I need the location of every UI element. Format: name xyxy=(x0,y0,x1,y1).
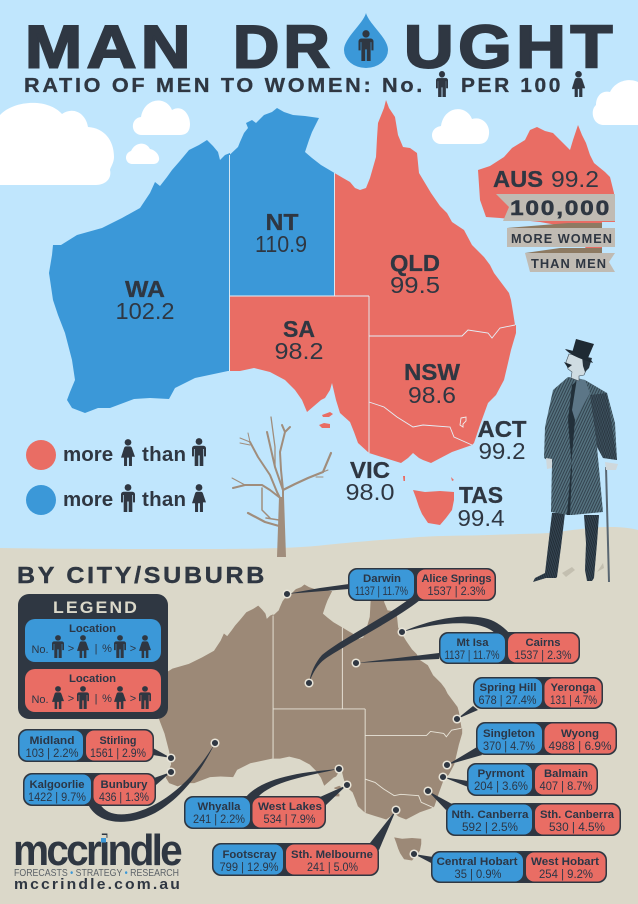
label: NSW: NSW xyxy=(404,359,460,385)
callout: Nth. Canberra / Sth. Canberra: Sth. Canberra xyxy=(540,809,615,821)
label: TAS: 99.4 xyxy=(458,505,505,531)
callout: Singleton / Wyong xyxy=(476,722,617,755)
label: VIC: 98.0 xyxy=(346,479,394,505)
title: DR xyxy=(233,14,334,80)
title: UGHT xyxy=(404,14,617,80)
legend row: red: % xyxy=(102,693,112,705)
label: VIC: VIC xyxy=(350,457,390,483)
legend row: blue: > xyxy=(68,643,74,655)
callout: Midland / Stirling: 1561 | 2.9% xyxy=(90,748,146,760)
callout: Spring Hill / Yeronga: 131 | 4.7% xyxy=(550,695,597,707)
subtitle xyxy=(24,71,585,97)
callout: Darwin / Alice Springs xyxy=(348,568,496,601)
title: MAN xyxy=(25,14,195,80)
legend row: red xyxy=(25,669,161,712)
callout: Footscray / Sth. Melbourne: Sth. Melbourne xyxy=(291,849,373,861)
callout: Central Hobart / West Hobart: West Hobart xyxy=(531,856,599,868)
label: NSW: 98.6 xyxy=(408,382,456,408)
legend row: blue: Location xyxy=(69,623,116,635)
map: cities and suburbs base map xyxy=(154,579,462,861)
map: Australia by state ratio xyxy=(49,100,516,525)
callout: Midland / Stirling: Stirling xyxy=(100,735,136,747)
legend: colour key: more xyxy=(63,488,113,511)
label: WA xyxy=(116,276,174,324)
label: NT: NT xyxy=(266,209,298,235)
legend row: red: > xyxy=(68,693,74,705)
label: TAS xyxy=(458,482,505,531)
legend row: blue xyxy=(25,619,161,662)
callout: Pyrmont / Balmain: 204 | 3.6% xyxy=(474,781,528,793)
callout: Midland / Stirling xyxy=(18,729,154,762)
callout: Mt Isa / Cairns xyxy=(439,632,580,664)
head and hat xyxy=(566,354,588,381)
legend row: red: Location xyxy=(69,673,116,685)
coat xyxy=(544,377,617,515)
label: VIC xyxy=(346,457,394,505)
callout: Mt Isa / Cairns: Cairns xyxy=(526,637,560,649)
callout: Spring Hill / Yeronga: Spring Hill xyxy=(480,682,536,694)
callout: Darwin / Alice Springs: 1537 | 2.3% xyxy=(428,586,486,598)
legend: colour key xyxy=(26,438,206,515)
callout: Singleton / Wyong: Singleton xyxy=(483,728,535,740)
legend: colour key: than xyxy=(142,488,186,511)
label: SA xyxy=(274,316,324,364)
callout: Singleton / Wyong: 370 | 4.7% xyxy=(483,741,535,753)
ground xyxy=(0,527,638,904)
callout: Central Hobart / West Hobart xyxy=(431,851,607,883)
callout: Singleton / Wyong: Wyong xyxy=(561,728,599,740)
callout: Midland / Stirling: 103 | 2.2% xyxy=(26,748,78,760)
label: QLD: 99.5 xyxy=(390,272,440,298)
label: TAS: TAS xyxy=(459,482,503,508)
callout: Pyrmont / Balmain: 407 | 8.7% xyxy=(540,781,592,793)
callout: Mt Isa / Cairns: 1137 | 11.7% xyxy=(444,650,500,662)
callout: Nth. Canberra / Sth. Canberra: Nth. Canberra xyxy=(452,809,529,821)
callout: Kalgoorlie / Bunbury: 436 | 1.3% xyxy=(99,792,149,804)
legend panel: LEGEND xyxy=(53,598,139,617)
illustration: gentleman in top hat xyxy=(533,339,618,582)
callout: Pyrmont / Balmain: Balmain xyxy=(544,768,588,780)
legend row: blue: % xyxy=(102,643,112,655)
callout: Spring Hill / Yeronga: 678 | 27.4% xyxy=(478,695,536,707)
label: NSW xyxy=(404,359,460,408)
callout: Kalgoorlie / Bunbury: Kalgoorlie xyxy=(30,779,84,791)
callout: Central Hobart / West Hobart: 254 | 9.2% xyxy=(539,869,593,881)
label: ACT xyxy=(478,416,526,464)
callout: Whyalla / West Lakes: 534 | 7.9% xyxy=(264,814,316,826)
callout: Footscray / Sth. Melbourne xyxy=(212,843,379,876)
callout: Kalgoorlie / Bunbury: 1422 | 9.7% xyxy=(28,792,86,804)
label: SA: 98.2 xyxy=(274,338,324,364)
callout: Nth. Canberra / Sth. Canberra xyxy=(446,803,621,836)
logo: mccrindle: mccrindle.com.au xyxy=(14,877,182,893)
callout: Spring Hill / Yeronga: Yeronga xyxy=(550,682,596,694)
callout: Whyalla / West Lakes xyxy=(184,796,326,829)
legend row: blue: | xyxy=(95,643,97,655)
title xyxy=(25,14,617,80)
callout: Pyrmont / Balmain: Pyrmont xyxy=(478,768,525,780)
legend row: red: > xyxy=(130,693,136,705)
callout: Midland / Stirling: Midland xyxy=(30,735,74,747)
connector lines xyxy=(88,584,510,864)
logo: mccrindle: FORECASTS • STRATEGY • RESEARCH xyxy=(14,868,179,879)
heading: by city/suburb: BY CITY/SUBURB xyxy=(17,562,267,588)
callout: Mt Isa / Cairns: Mt Isa xyxy=(456,637,489,649)
logo: mccrindle: mccrindle xyxy=(13,826,181,875)
callout: Whyalla / West Lakes: 241 | 2.2% xyxy=(193,814,245,826)
label: ACT: ACT xyxy=(478,416,526,442)
callout: Singleton / Wyong: 4988 | 6.9% xyxy=(548,741,612,753)
national total panel: small Australia map with ribbons: MORE WOMEN xyxy=(511,232,613,246)
label: QLD: QLD xyxy=(390,250,440,276)
national total panel: small Australia map with ribbons xyxy=(478,125,615,272)
legend panel xyxy=(18,594,168,719)
label: WA: WA xyxy=(125,276,165,302)
legend: colour key: more xyxy=(63,443,113,466)
hands xyxy=(546,458,552,469)
cane xyxy=(605,467,610,582)
callout: Mt Isa / Cairns: 1537 | 2.3% xyxy=(514,650,572,662)
location dots xyxy=(167,590,461,858)
national total panel: small Australia map with ribbons: THAN MEN xyxy=(531,257,607,271)
callout: Central Hobart / West Hobart: Central Hobart xyxy=(436,856,518,868)
callout: Kalgoorlie / Bunbury: Bunbury xyxy=(100,779,148,791)
legend row: red: No. xyxy=(31,694,49,706)
national total panel: small Australia map with ribbons: 100,000 xyxy=(510,197,611,220)
national total panel: small Australia map with ribbons: AUS xyxy=(493,166,543,192)
callout: Darwin / Alice Springs: 1137 | 11.7% xyxy=(355,586,408,598)
callout: Footscray / Sth. Melbourne: 799 | 12.9% xyxy=(220,862,278,874)
logo: mccrindle xyxy=(13,826,182,893)
shoe shadow xyxy=(562,563,604,577)
illustration: bare tree xyxy=(232,417,331,557)
callout: Footscray / Sth. Melbourne: Footscray xyxy=(222,849,277,861)
legend row: red: | xyxy=(95,693,97,705)
callout: Footscray / Sth. Melbourne: 241 | 5.0% xyxy=(307,862,358,874)
legend row: blue: No. xyxy=(31,644,49,656)
label: ACT: 99.2 xyxy=(478,438,526,464)
callout: Spring Hill / Yeronga xyxy=(473,677,603,709)
callout: Whyalla / West Lakes: Whyalla xyxy=(198,801,241,813)
legend row: blue: > xyxy=(130,643,136,655)
callout: Darwin / Alice Springs: Darwin xyxy=(363,573,401,585)
label: NT: 110.9 xyxy=(255,231,307,257)
icon: water drop with man xyxy=(344,13,388,68)
subtitle: PER 100 xyxy=(461,75,563,97)
legend: colour key: than xyxy=(142,443,186,466)
clouds xyxy=(0,80,638,185)
callout: Pyrmont / Balmain xyxy=(467,763,598,796)
label: QLD xyxy=(390,250,440,298)
callout: Kalgoorlie / Bunbury xyxy=(23,773,156,806)
callout: Nth. Canberra / Sth. Canberra: 592 | 2.5% xyxy=(462,822,518,834)
label: WA: 102.2 xyxy=(116,298,174,324)
label: NT xyxy=(255,209,307,257)
callout: Whyalla / West Lakes: West Lakes xyxy=(258,801,322,813)
national total panel: small Australia map with ribbons: 99.2 xyxy=(551,166,599,192)
subtitle: RATIO OF MEN TO WOMEN: No. xyxy=(24,75,425,97)
callout: Nth. Canberra / Sth. Canberra: 530 | 4.5% xyxy=(549,822,605,834)
callout: Darwin / Alice Springs: Alice Springs xyxy=(422,573,492,585)
callout: Central Hobart / West Hobart: 35 | 0.9% xyxy=(454,869,502,881)
trousers xyxy=(533,513,599,582)
label: SA: SA xyxy=(283,316,315,342)
